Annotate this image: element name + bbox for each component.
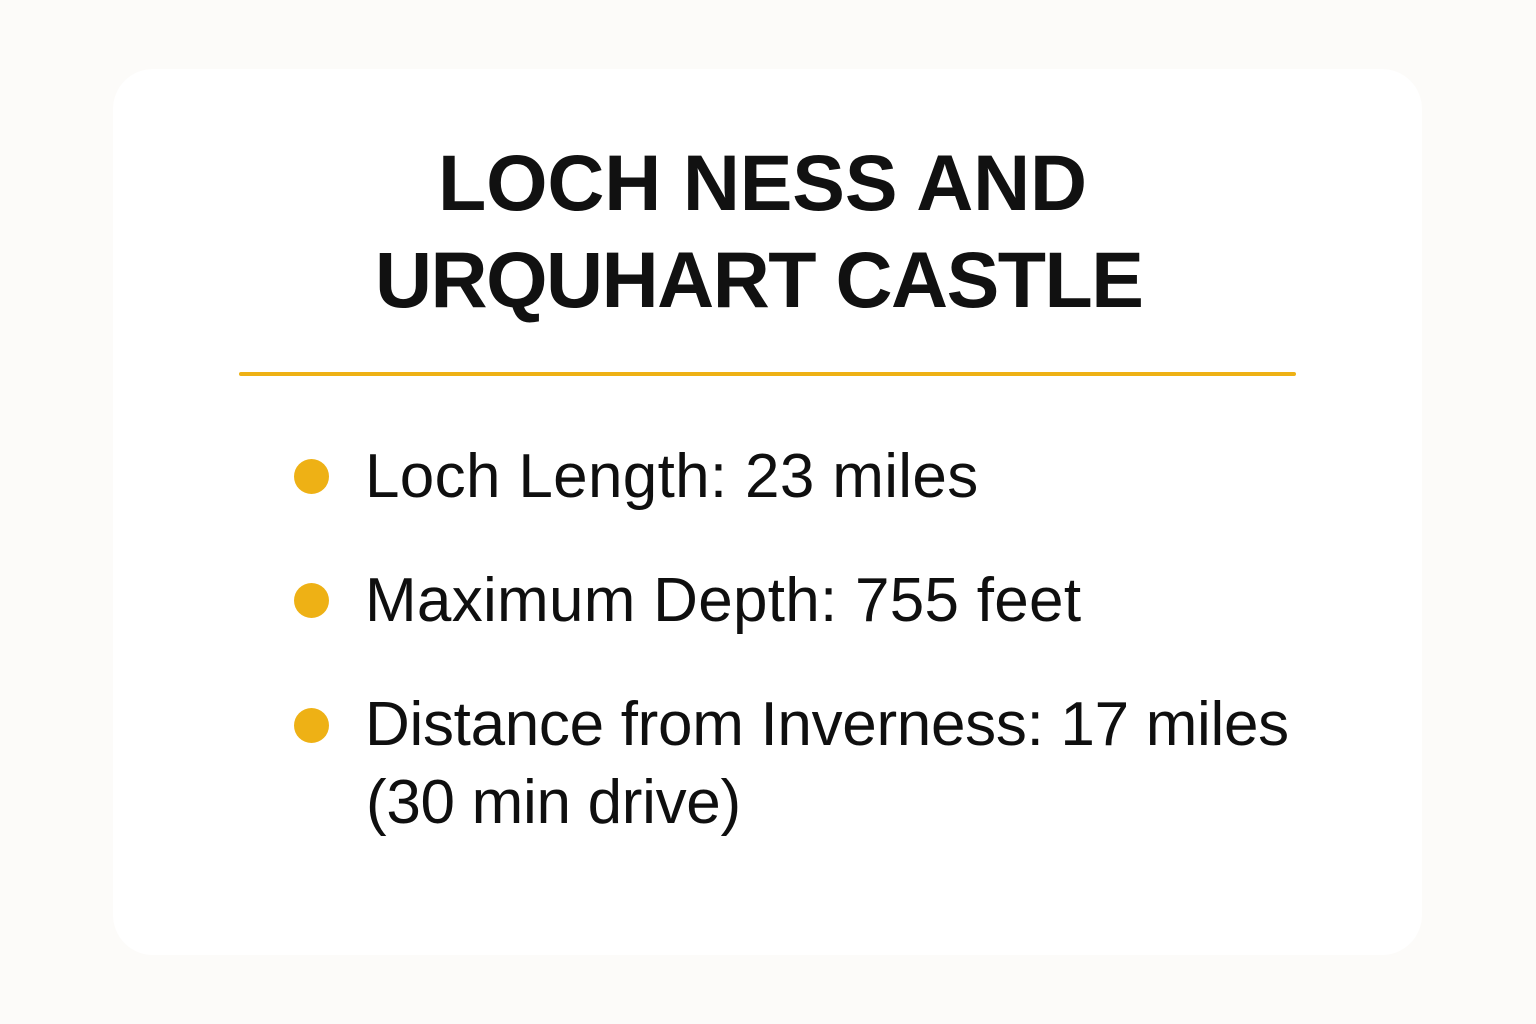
text: distance from Inverness: Distance from Inverness: 17 miles	[365, 690, 1289, 759]
text: loch length: Loch Length: 23 miles	[365, 442, 979, 511]
panel: white card	[113, 69, 1422, 955]
title line 2: URQUHART CASTLE	[375, 235, 1142, 324]
bullet icon: distance	[294, 708, 329, 743]
text: distance from Inverness	[365, 690, 1289, 837]
text: distance from Inverness: (30 min drive)	[366, 768, 741, 837]
bullet icon: maximum depth	[294, 583, 329, 618]
text: maximum depth: Maximum Depth: 755 feet	[365, 566, 1081, 635]
bullet icon: loch length	[294, 459, 329, 494]
divider line	[239, 372, 1296, 376]
title line 1: LOCH NESS AND	[438, 138, 1087, 227]
